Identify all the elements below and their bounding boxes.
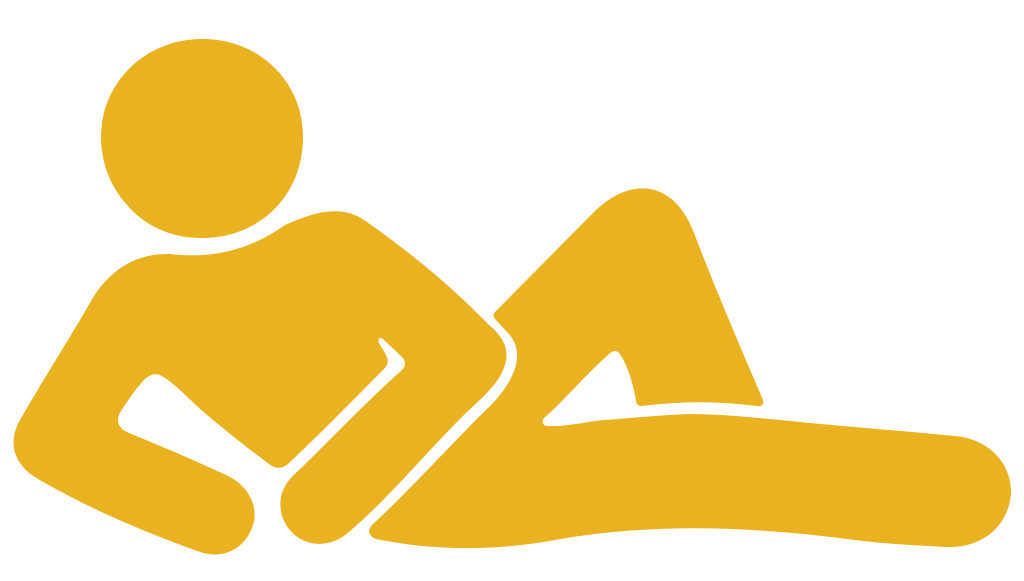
legs [369,188,1011,548]
torso and arms [14,211,507,554]
head [101,39,303,238]
